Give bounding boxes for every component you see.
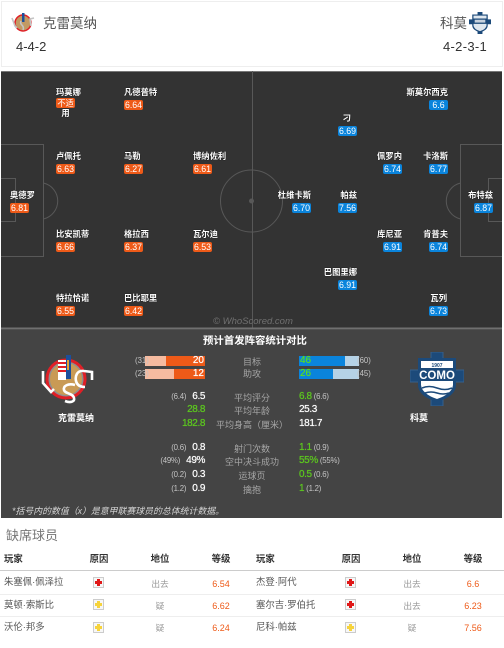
table header: 原因 [342,553,360,564]
player: 肯普夫: 肯普夫 [423,229,448,239]
player: 博纳佐利 [193,151,226,174]
player: 肯普夫 [423,229,448,252]
row 1: 6.6 [467,579,479,589]
stat row: average rating: (6.4) 6.5 [171,391,205,402]
row 1: 朱塞佩·佩泽拉 [4,576,63,587]
row 1: 出去 [151,579,169,589]
stat row: aerial duels: 空中决斗成功 [225,457,279,467]
row 3: 疑 [156,623,164,633]
table header: 地位 [151,553,169,564]
player: 卢佩托: 卢佩托 [56,151,81,161]
bar: away goals: (60) [357,356,371,365]
player: 瓦尔迪 [193,229,218,252]
player: 刁: 6.69 [339,126,356,136]
home team name: 克雷莫纳 [43,16,97,31]
bar: home assists [135,368,205,379]
bar: home goals: 20 [193,355,204,366]
player: 比安凯蒂: 6.66 [57,242,74,252]
player: 布特兹: 6.87 [475,203,492,213]
player: 布特兹 [468,190,493,213]
table header: 原因 [90,553,108,564]
stat row: dribbles: 运球页 [238,471,266,481]
player: 奥德罗: 奥德罗 [10,190,35,200]
row 1: 出去 [403,579,421,589]
row 2: 出去 [403,601,421,611]
player: 斯莫尔西克: 斯莫尔西克 [406,87,448,97]
player: 瓦尔迪: 6.53 [194,242,211,252]
stat row: dribbles: 0.5 (0.6) [299,469,329,480]
icon: Como large crest: 1907 [431,363,443,369]
player: 巴图里娜: 巴图里娜 [324,267,357,277]
player: 杜维卡斯 [278,190,311,213]
bar: away assists: (45) [357,369,371,378]
table header: 等级 [464,553,482,564]
bar: home goals [135,355,205,366]
row 3: 7.56 [464,623,482,633]
stat row: dribbles: (0.2) 0.3 [171,469,205,480]
bar: away goals [299,355,371,366]
stat row: aerial duels: (49%) 49% [160,455,205,466]
stat row: tackles: (1.2) 0.9 [171,483,205,494]
stat row: shots: 射门次数 [234,444,270,454]
label: goals: 目标 [243,357,261,367]
player: 佩罗内 [377,151,402,174]
stat row: shots: (0.6) 0.8 [171,442,205,453]
player: 比安凯蒂 [56,229,89,252]
player: 卡洛斯: 卡洛斯 [423,151,448,161]
player: 佩罗内: 佩罗内 [377,151,402,161]
player: 斯莫尔西克: 6.6 [432,100,445,110]
away formation: 4-2-3-1 [443,39,487,54]
player: 卡洛斯: 6.77 [430,164,447,174]
player: 佩罗内: 6.74 [384,164,401,174]
stat row: average age: 25.3 [299,404,317,415]
stat row: average age: 平均年龄 [234,406,270,416]
bar: home goals: (31) [135,356,149,365]
stat row: average rating [171,391,329,403]
table header: 玩家 [256,553,275,564]
row 3 [4,621,482,633]
player: 玛莫娜: 不适 [57,98,74,108]
player: 帕兹: 7.56 [339,203,356,213]
row 2: 莫顿·索斯比 [4,599,54,610]
player: 杜维卡斯: 杜维卡斯 [278,190,311,200]
bar: away assists: 26 [300,368,311,379]
row 2: 塞尔吉·罗伯托 [256,599,315,610]
player: 凡德普特: 6.64 [125,100,142,110]
player: 马勒 [124,151,143,174]
panel: pitch [1,71,502,330]
player: 瓦列: 瓦列 [430,293,447,303]
bar: home assists: 12 [193,368,204,379]
stat row: average height [182,418,322,430]
player: 特拉恰诺 [56,293,89,316]
player: 卢佩托 [56,151,81,174]
player: 刁 [338,113,357,136]
player: 凡德普特: 凡德普特 [124,87,157,97]
player: 特拉恰诺: 特拉恰诺 [56,293,89,303]
player: 肯普夫: 6.74 [430,242,447,252]
label: assists: 助攻 [243,369,261,379]
stat row: tackles [171,483,321,495]
stat row: tackles: 擒抱 [243,485,261,495]
player: 库尼亚: 库尼亚 [377,229,402,239]
row 2: 6.23 [464,601,482,611]
player: 帕兹: 帕兹 [340,190,357,200]
player: 玛莫娜: 玛莫娜 [56,87,81,97]
player: 奥德罗: 6.81 [11,203,28,213]
table header: 地位 [403,553,421,564]
panel: stat comparison [1,330,502,518]
player: 卢佩托: 6.63 [57,164,74,174]
player: 斯莫尔西克 [406,87,448,110]
player: 凡德普特 [124,87,157,110]
player: 帕兹 [338,190,357,213]
row 1 [0,572,504,595]
player: 库尼亚 [377,229,402,252]
row 2: 6.62 [212,601,230,611]
player: 杜维卡斯: 6.70 [293,203,310,213]
bar: away assists [299,368,371,379]
away team name: 科莫 [440,16,467,31]
player: 玛莫娜 [56,87,81,118]
player: 卡洛斯 [423,151,448,174]
player: 布特兹: 布特兹 [468,190,493,200]
player: 格拉西 [124,229,149,252]
home team label: 克雷莫纳 [58,413,94,423]
watermark: © WhoScored.com [213,316,293,327]
stat title: 预计首发阵容统计对比 [203,336,307,347]
row 3: 6.24 [212,623,230,633]
row 3: 沃伦·邦多 [4,621,45,632]
stat row: dribbles [171,469,329,481]
player: 马勒: 6.27 [125,164,142,174]
player: 玛莫娜: 用 [61,108,70,118]
icon: Cremonese small crest [11,13,34,32]
player: 巴图里娜: 6.91 [339,280,356,290]
icon: Como large crest [410,352,464,406]
player: 比安凯蒂: 比安凯蒂 [56,229,89,239]
row 2 [0,594,504,617]
player: 马勒: 马勒 [124,151,141,161]
stat row: aerial duels: 55% (55%) [299,455,340,466]
stat row: average age: 28.8 [187,404,205,415]
stat row: tackles: 1 (1.2) [299,483,321,494]
player: 博纳佐利: 6.61 [194,164,211,174]
player: 巴图里娜 [324,267,357,290]
stat row: average height: 平均身高（厘米） [216,420,288,430]
stat row: shots: 1.1 (0.9) [299,442,329,453]
row 1: 6.54 [212,579,230,589]
stat row: average rating: 6.8 (6.6) [299,391,329,402]
player: 格拉西: 6.37 [125,242,142,252]
player: 巴比耶里 [124,293,157,316]
row 3: 尼科·帕兹 [256,621,297,632]
row 1: 杰登·阿代 [256,576,297,587]
table header: 等级 [212,553,230,564]
player: 瓦列 [429,293,448,316]
footnote: *括号内的数值（x）是意甲联赛球员的总体统计数据。 [12,506,224,516]
player: 瓦列: 6.73 [430,306,447,316]
player: 奥德罗 [10,190,35,213]
table header: 玩家 [4,553,23,564]
table header [0,553,504,571]
panel: match header [1,1,503,67]
player: 特拉恰诺: 6.55 [57,306,74,316]
pitch markings [1,71,502,330]
stat row: average rating: 平均评分 [234,393,270,403]
player: 库尼亚: 6.91 [384,242,401,252]
stat row: average height: 181.7 [299,418,322,429]
player: 博纳佐利: 博纳佐利 [193,151,226,161]
heading: missing players: 缺席球员 [6,528,58,543]
row 3: 疑 [408,623,416,633]
icon: Como large crest: COMO [419,370,455,382]
bar: home assists: (23) [135,369,149,378]
icon: Cremonese large crest [42,355,94,404]
away team label: 科莫 [410,413,428,423]
player: 瓦尔迪: 瓦尔迪 [193,229,218,239]
home formation: 4-4-2 [16,39,46,54]
bar: away goals: 46 [300,355,311,366]
stat row: shots [171,442,329,454]
row 2: 疑 [156,601,164,611]
player: 巴比耶里: 6.42 [125,306,142,316]
icon: Como small crest [469,12,491,34]
player: 刁: 刁 [343,113,351,123]
stat row: average age [187,404,318,416]
table: missing players [0,553,504,633]
stat row: average height: 182.8 [182,418,205,429]
stat row: aerial duels [160,455,340,467]
player: 巴比耶里: 巴比耶里 [124,293,157,303]
player: 格拉西: 格拉西 [124,229,149,239]
